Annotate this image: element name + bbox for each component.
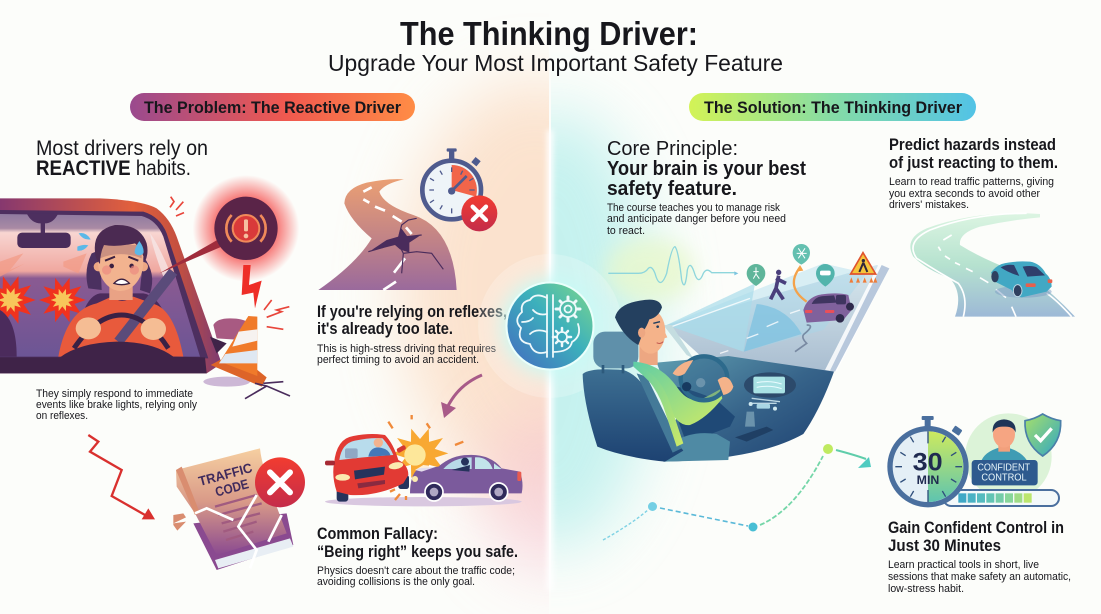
illustration: 30 minute timer with confident driver: CONTROL bbox=[981, 472, 1027, 483]
progress bar bbox=[943, 490, 1059, 506]
arrow: red zigzag bbox=[88, 435, 155, 519]
illustration: cracked road bbox=[318, 179, 457, 290]
title bbox=[328, 15, 783, 76]
illustration: road view with hazards bbox=[667, 244, 889, 372]
text block: gain confident control bbox=[888, 519, 1071, 595]
text block: predict hazards: drivers' mistakes. bbox=[889, 199, 969, 211]
text block: predict hazards: of just reacting to them. bbox=[889, 154, 1058, 172]
text block: they simply respond: They simply respond to immediate bbox=[36, 388, 193, 400]
heading: the problem bbox=[130, 93, 415, 121]
text block: predict hazards: you extra seconds to avoid other bbox=[889, 188, 1040, 200]
arrow: curved purple bbox=[441, 375, 482, 418]
heading: the solution bbox=[689, 93, 976, 121]
illustration: car crash bbox=[325, 415, 523, 506]
text block: relying on reflexes: perfect timing to avoid an accident. bbox=[317, 354, 479, 366]
text block: predict hazards bbox=[889, 136, 1058, 211]
text block: core principle: The course teaches you to manage risk bbox=[607, 202, 780, 214]
text block: core principle bbox=[607, 138, 806, 237]
text block: reactive habits bbox=[36, 137, 208, 180]
heading: the problem: The Problem: The Reactive Driver bbox=[144, 99, 402, 117]
text block: relying on reflexes: If you're relying on reflexes, bbox=[317, 303, 507, 321]
text block: gain confident control: low-stress habit. bbox=[888, 583, 964, 595]
text block: relying on reflexes: This is high-stress driving that requires bbox=[317, 343, 496, 355]
warning sign and cones bbox=[851, 253, 876, 274]
illustration: 30 minute timer with confident driver: CONFIDENT bbox=[977, 463, 1030, 474]
mirror bbox=[27, 213, 58, 233]
text block: common fallacy: Common Fallacy: bbox=[317, 524, 438, 543]
text block: gain confident control: Gain Confident Control in bbox=[888, 519, 1064, 537]
text block: relying on reflexes: it's already too late. bbox=[317, 320, 453, 338]
text block: they simply respond: events like brake lights, relying only bbox=[36, 399, 197, 411]
text block: common fallacy: Physics doesn't care about the traffic code; bbox=[317, 565, 515, 577]
text block: core principle: Core Principle: bbox=[607, 138, 738, 160]
text block: common fallacy bbox=[317, 524, 518, 588]
title: The Thinking Driver: bbox=[400, 15, 698, 52]
chart: signal wave bbox=[608, 247, 738, 285]
person bbox=[982, 447, 1027, 467]
text block: gain confident control: Just 30 Minutes bbox=[888, 537, 1001, 555]
heading: the solution: The Solution: The Thinking Driver bbox=[704, 99, 963, 117]
red car bbox=[337, 487, 348, 502]
text block: gain confident control: sessions that make safety an automatic, bbox=[888, 571, 1071, 583]
text block: they simply respond: on reflexes. bbox=[36, 410, 88, 422]
text block: core principle: Your brain is your best bbox=[607, 158, 806, 180]
chart: learning path with dots bbox=[603, 444, 871, 540]
icon: brake warning light bbox=[159, 197, 289, 353]
stopwatch bbox=[922, 416, 934, 420]
icon: stopwatch with x bbox=[422, 148, 497, 231]
icon: traffic cone bbox=[203, 316, 290, 399]
text block: predict hazards: Predict hazards instead bbox=[889, 136, 1056, 154]
background bbox=[372, 56, 702, 589]
illustration: calm driver at wheel bbox=[583, 300, 834, 462]
text block: core principle: and anticipate danger before you need bbox=[607, 213, 786, 225]
illustration: broken traffic code book: CODE bbox=[214, 476, 250, 500]
illustration: 30 minute timer with confident driver: MIN bbox=[917, 473, 939, 487]
text block: common fallacy: avoiding collisions is the only goal. bbox=[317, 576, 475, 588]
text block: predict hazards: Learn to read traffic patterns, giving bbox=[889, 176, 1054, 188]
illustration: stressed driver in car bbox=[0, 175, 299, 373]
illustration: 30 minute timer with confident driver: 30 bbox=[913, 450, 943, 477]
text block: core principle: safety feature. bbox=[607, 178, 737, 200]
illustration: winding road with blue car bbox=[910, 213, 1075, 317]
text block: reactive habits: Most drivers rely on bbox=[36, 137, 208, 160]
title: Upgrade Your Most Important Safety Feature bbox=[328, 50, 783, 76]
purple car bbox=[410, 455, 523, 493]
text block: relying on reflexes bbox=[317, 303, 507, 366]
map pins bbox=[747, 264, 765, 286]
text block: common fallacy: “Being right” keeps you safe. bbox=[317, 542, 518, 561]
text block: reactive habits: REACTIVE habits. bbox=[36, 157, 191, 180]
illustration: broken traffic code book bbox=[173, 448, 305, 570]
steering wheel bbox=[681, 356, 727, 400]
illustration: 30 minute timer with confident driver bbox=[890, 413, 1061, 506]
text block: they simply respond bbox=[36, 388, 197, 422]
text block: gain confident control: Learn practical tools in short, live bbox=[888, 559, 1039, 571]
text block: core principle: to react. bbox=[607, 225, 645, 237]
pedestrian bbox=[776, 270, 781, 275]
shield with check bbox=[1025, 414, 1061, 456]
illustration: broken traffic code book: TRAFFIC bbox=[197, 460, 254, 489]
icon: brain and gears bbox=[478, 254, 622, 398]
purple car ahead bbox=[803, 293, 852, 323]
